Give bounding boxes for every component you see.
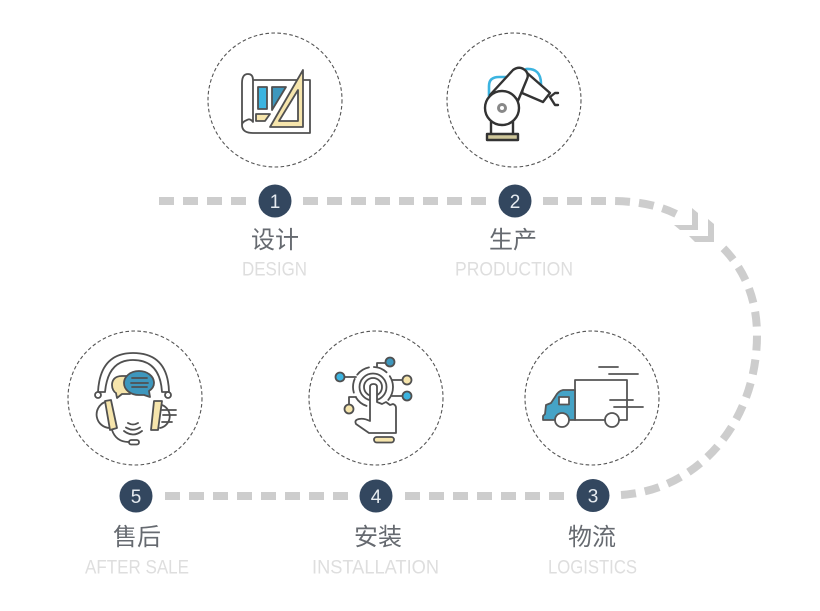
icon: touch hand with nodes [336, 358, 412, 442]
label 物流: 物流 [568, 524, 616, 551]
icon: headset with speech bubbles [95, 353, 176, 444]
icon: blueprint and set square [242, 70, 310, 133]
arrow: direction chevrons [674, 208, 714, 242]
label AFTER SALE: AFTER SALE [85, 556, 189, 578]
step badge 4 [360, 480, 392, 512]
label 安装: 安装 [354, 524, 402, 551]
step badge 5 [120, 480, 152, 512]
label LOGISTICS: LOGISTICS [548, 556, 637, 578]
step badge 5: 5 [131, 487, 141, 508]
icon circle 5 [68, 331, 202, 465]
step 4: installation [309, 331, 443, 578]
label DESIGN: DESIGN [242, 258, 307, 280]
icon circle 1 [208, 33, 342, 167]
dashed process path [159, 201, 757, 496]
icon: robot arm [485, 68, 558, 140]
label 生产: 生产 [489, 227, 537, 254]
label 售后: 售后 [113, 524, 161, 551]
label INSTALLATION: INSTALLATION [312, 556, 439, 578]
step badge 1: 1 [270, 192, 280, 213]
step badge 1 [258, 184, 292, 218]
step badge 2 [498, 184, 532, 218]
icon circle 4 [309, 331, 443, 465]
step 3: logistics [525, 331, 659, 578]
step 2: production [447, 33, 581, 280]
step badge 2: 2 [510, 192, 520, 213]
step 5: after sale [68, 331, 202, 578]
label 设计: 设计 [251, 227, 299, 254]
step 1: design [208, 33, 342, 280]
icon circle 2 [447, 33, 581, 167]
step badge 3: 3 [588, 486, 598, 508]
step badge 3 [576, 479, 610, 512]
label PRODUCTION: PRODUCTION [455, 258, 573, 280]
icon circle 3 [525, 331, 659, 465]
step badge 4: 4 [371, 487, 382, 508]
icon: delivery truck [543, 367, 643, 427]
